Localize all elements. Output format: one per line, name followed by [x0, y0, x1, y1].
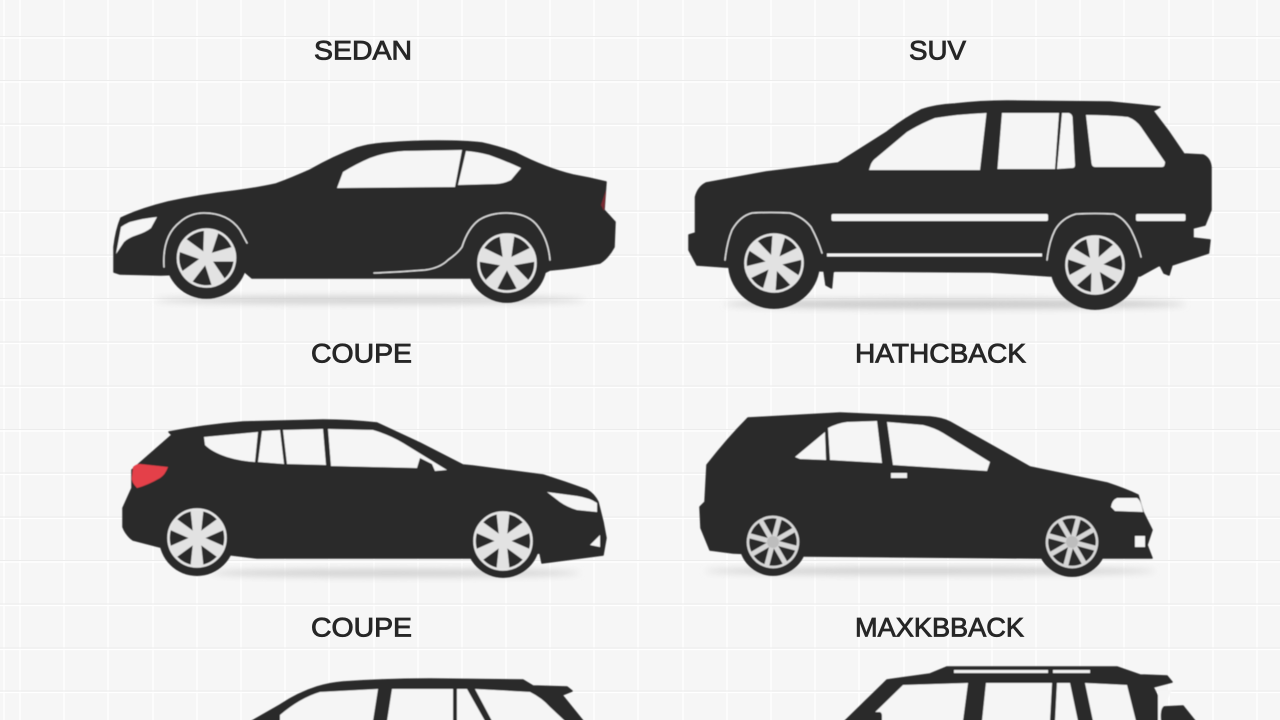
- heading: HATHCBACK: HATHCBACK: [855, 338, 1026, 368]
- coupe side windows: [204, 429, 447, 471]
- coupe lower grille: [590, 535, 600, 547]
- car: middle left coupe silhouette: [123, 420, 606, 578]
- SUV wheel arches: [725, 212, 1141, 260]
- sedan wheel arches and sill line: [164, 213, 550, 273]
- coupe red tail light: [132, 464, 168, 488]
- car: bottom right roof, cropped by the page edge: [845, 667, 1195, 720]
- SUV body side strips: [827, 214, 1186, 256]
- bottom right car roof rails: [954, 670, 1090, 673]
- coupe headlight: [547, 492, 597, 512]
- hatchback headlight: [1111, 498, 1143, 512]
- sedan headlight: [116, 217, 157, 254]
- heading: SUV: SUV: [909, 36, 966, 66]
- hatchback side windows: [795, 421, 990, 471]
- heading: COUPE, bottom row: COUPE: [311, 612, 412, 642]
- heading: garbled hatchback label: MAXKBBACK: [855, 612, 1024, 642]
- heading: SEDAN: SEDAN: [314, 36, 412, 66]
- car: middle right hatchback silhouette: [700, 413, 1155, 577]
- car: bottom left roof, cropped by the page edge: [252, 679, 583, 720]
- bottom left car windows: [280, 689, 565, 720]
- SUV side windows: [869, 113, 1165, 170]
- sedan tail light: [601, 190, 606, 211]
- bottom right car windows: [866, 683, 1172, 720]
- hatchback fog light: [1135, 536, 1145, 547]
- hatchback door handle: [891, 473, 907, 478]
- car: sedan silhouette: [114, 141, 615, 304]
- sedan side windows: [337, 150, 521, 188]
- car: SUV silhouette: [689, 101, 1211, 310]
- bottom right car mirror: [863, 712, 882, 720]
- heading: COUPE, middle row: COUPE: [311, 338, 412, 368]
